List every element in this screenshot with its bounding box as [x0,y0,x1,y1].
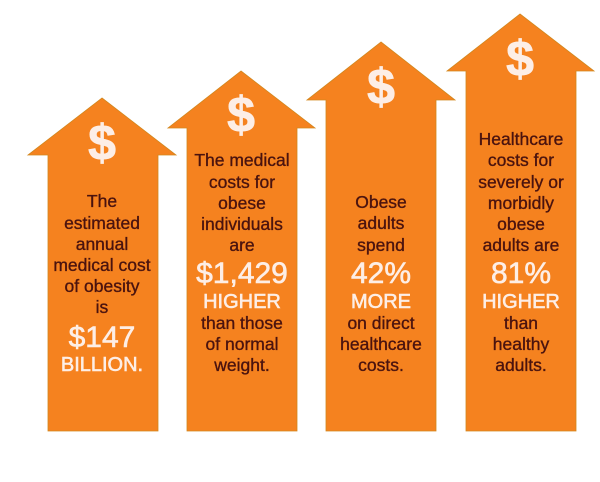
text: cost description 2: individuals [201,214,283,234]
arrow: annual medical cost [28,98,176,431]
text: description 4: severely or [478,172,564,192]
icon: dollar sign 1: $ [88,115,116,171]
text: cost description 2: obese [218,193,266,213]
icon: dollar sign 2: $ [227,87,255,143]
arrow shape 3 [307,42,455,431]
stat: $147 billion: $147 [69,321,135,354]
text: description 4: morbidly [488,193,554,213]
text: description 4: adults are [483,235,559,255]
arrow shape 2 [168,71,315,431]
text: cost description 1: estimated [64,213,140,233]
text: description 4: costs for [488,150,554,170]
text: comparison 2: of normal [206,334,278,354]
stat: $147 billion: BILLION. [61,354,143,376]
icon: dollar sign 4: $ [506,31,534,87]
text: cost description 2: are [229,235,255,255]
stat: 42% more: 42% [351,257,411,290]
text: comparison 2: weight. [213,355,270,375]
text: cost description 2: The medical [194,150,290,170]
text: cost description 2: costs for [209,172,275,192]
text: cost description 1: is [96,297,109,317]
icon: dollar sign 3: $ [367,59,395,115]
arrow shape 1 [28,98,176,431]
text: description 3: adults [358,213,405,233]
stat: 81% higher: HIGHER [482,291,560,313]
text: cost description 1: The [87,191,117,211]
arrow shape 4 [447,14,594,431]
text: description 3: Obese [355,192,407,212]
text: cost description 1: medical cost [53,255,151,275]
text: cost description 1: of obesity [65,276,140,296]
text: description 4: obese [497,214,545,234]
text: comparison 4: than [504,313,538,333]
stat: $1,429 higher: $1,429 [196,257,288,290]
text: comparison 3: on direct [347,313,415,333]
arrow: severely obese costs [447,14,594,431]
text: description 3: spend [357,235,405,255]
text: comparison 4: adults. [495,355,547,375]
text: description 4: Healthcare [479,129,563,149]
text: cost description 1: annual [76,234,128,254]
arrow: direct healthcare costs [307,42,455,431]
text: comparison 2: than those [201,313,283,333]
stat: $1,429 higher: HIGHER [203,291,281,313]
stat: 42% more: MORE [351,291,411,313]
stat: 81% higher: 81% [491,257,551,290]
arrow: individual medical costs [168,71,315,431]
text: comparison 3: healthcare [340,334,422,354]
text: comparison 4: healthy [493,334,549,354]
text: comparison 3: costs. [358,355,404,375]
